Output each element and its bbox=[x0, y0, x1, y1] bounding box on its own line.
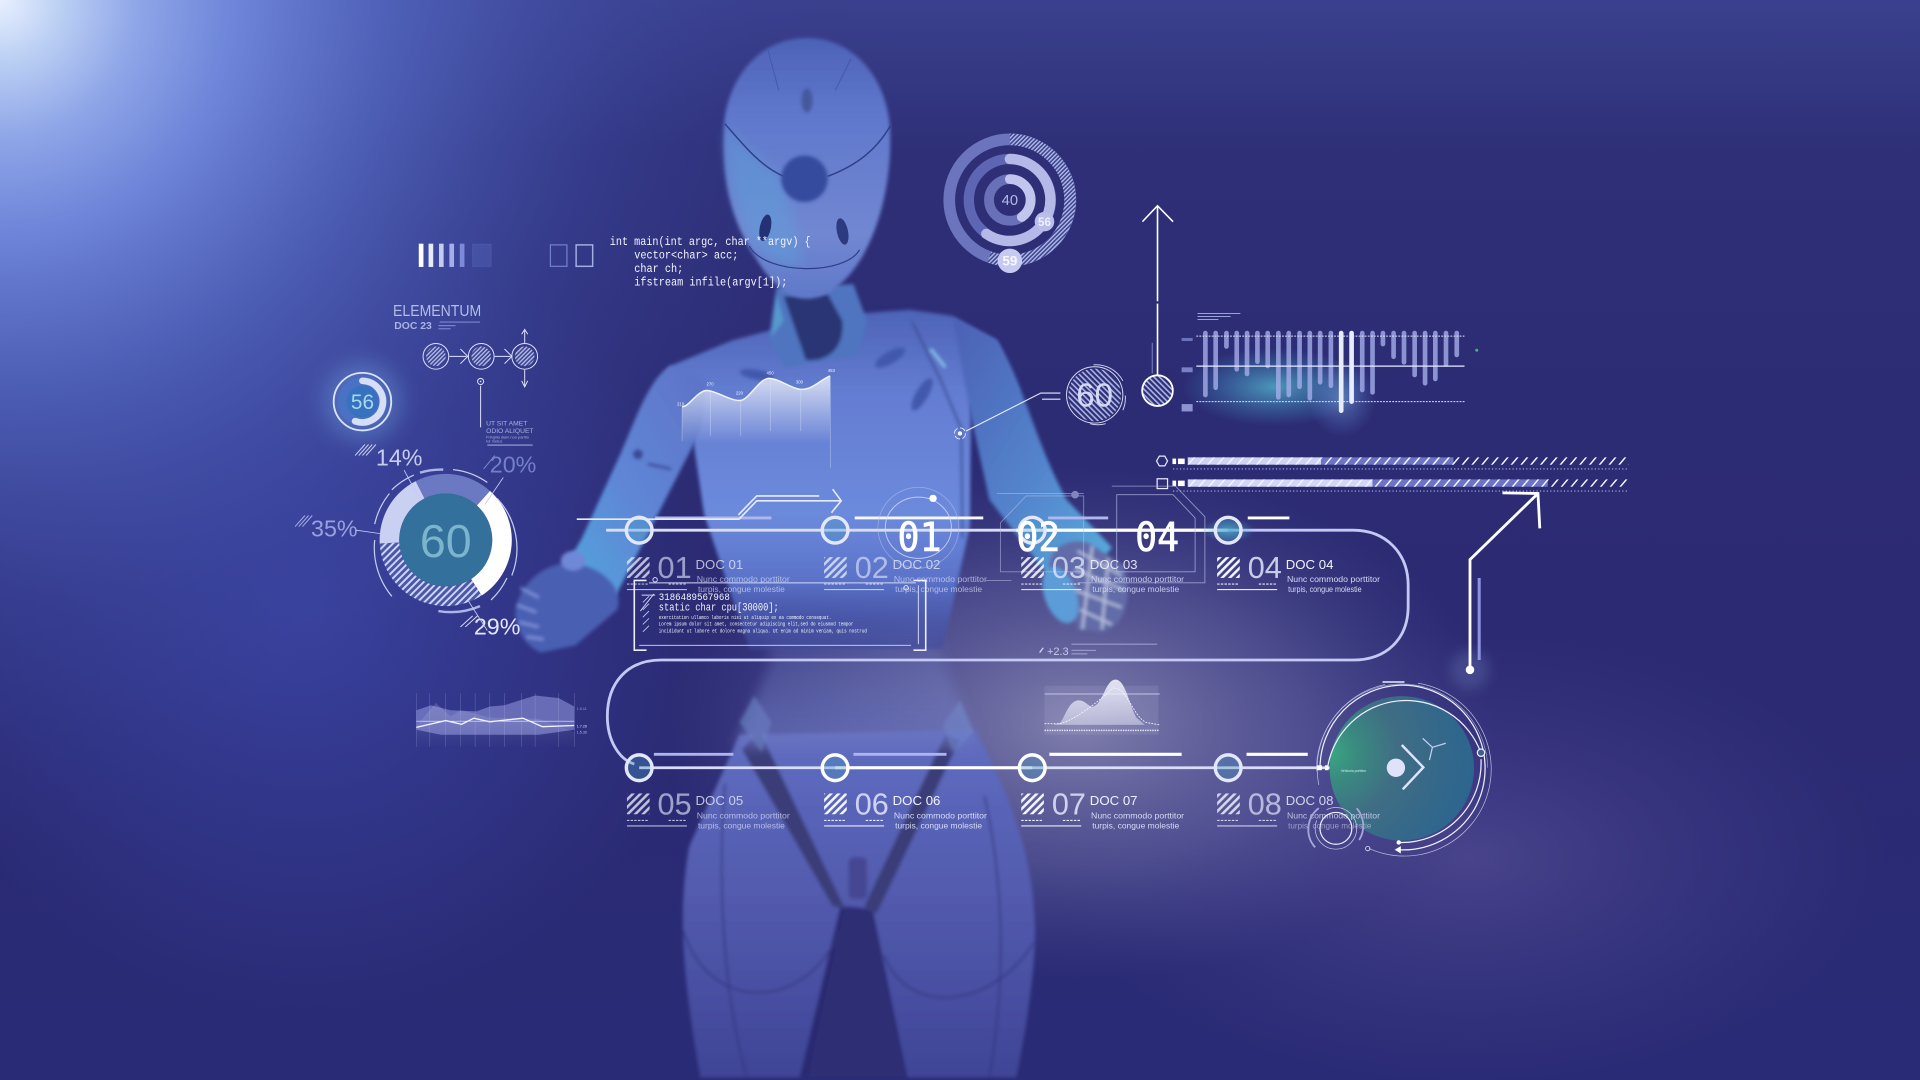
timeline item 05: turpis, congue molestie bbox=[698, 820, 785, 830]
donut chart 60: 60 bbox=[420, 515, 472, 567]
elementum title bbox=[393, 303, 481, 332]
chest line chart: 300 bbox=[796, 379, 804, 384]
chest line chart: 453 bbox=[828, 368, 835, 373]
timeline item 08 bbox=[1217, 787, 1380, 830]
chest line chart: 450 bbox=[767, 371, 774, 376]
timeline item 06: Nunc commodo porttitor bbox=[894, 811, 987, 821]
large mono numbers 01 02 04: 02 bbox=[1016, 513, 1060, 561]
timeline item 02: 02 bbox=[855, 551, 889, 585]
arrow route above timeline bbox=[577, 489, 841, 519]
robot legs bbox=[683, 696, 1035, 1078]
target rings around 01 bbox=[878, 487, 959, 568]
timeline item 07: Nunc commodo porttitor bbox=[1091, 811, 1184, 821]
donut labels and leader lines bbox=[295, 444, 536, 639]
robot torso bbox=[649, 310, 1019, 649]
code box: Lorem ipsum dolor sit amet, consectetur adipiscing elit,sed do eiusmod tempor bbox=[659, 622, 853, 628]
timeline item 06: 06 bbox=[855, 787, 889, 821]
timeline item 05 bbox=[627, 787, 790, 830]
bottom right radar disc: Vehicula porttitor bbox=[1341, 769, 1367, 773]
timeline item 06: DOC 06 bbox=[893, 793, 940, 808]
timeline item 03: Nunc commodo porttitor bbox=[1091, 574, 1184, 584]
gauge 60 with leader: 60 bbox=[1076, 378, 1113, 415]
timeline item 08: DOC 08 bbox=[1286, 793, 1333, 808]
code box: static char cpu[30000]; bbox=[659, 602, 779, 614]
robot right hand bbox=[1035, 541, 1128, 632]
pointer note: ODIO ALIQUET bbox=[486, 428, 534, 435]
timeline item 01: Nunc commodo porttitor bbox=[697, 574, 790, 584]
code snippet: char ch; bbox=[634, 262, 683, 276]
concentric gauge: 59 bbox=[1002, 254, 1017, 269]
timeline item 02: Nunc commodo porttitor bbox=[894, 574, 987, 584]
concentric gauge: 56 bbox=[1038, 216, 1051, 229]
timeline nodes bbox=[626, 517, 1241, 781]
lower left area chart: 1.7.20 bbox=[577, 724, 587, 728]
robot waist haze bbox=[735, 624, 980, 747]
donut labels and leader lines: 29% bbox=[474, 613, 520, 639]
timeline item 05: 05 bbox=[658, 787, 692, 821]
lower left area chart bbox=[416, 693, 587, 747]
chest line chart bbox=[677, 368, 835, 468]
timeline item 08: 08 bbox=[1248, 787, 1282, 821]
robot left hand bbox=[515, 551, 618, 653]
timeline item 02 bbox=[824, 551, 987, 594]
large mono numbers 01 02 04: 01 bbox=[898, 513, 942, 561]
gauge 60 with leader bbox=[954, 365, 1125, 439]
timeline item 04: 04 bbox=[1248, 551, 1282, 585]
donut labels and leader lines: 20% bbox=[490, 452, 536, 478]
timeline item 04: Nunc commodo porttitor bbox=[1287, 574, 1380, 584]
code box bbox=[634, 578, 926, 650]
timeline frame bbox=[606, 518, 1408, 768]
lower left area chart: 1.5.30 bbox=[577, 730, 587, 734]
bottom right radar disc bbox=[1316, 682, 1491, 856]
robot figure bbox=[515, 38, 1128, 1078]
timeline item 03: turpis, congue molestie bbox=[1092, 584, 1179, 594]
pointer note: Fringilla diam non partito bbox=[486, 434, 530, 439]
elementum title: ELEMENTUM bbox=[393, 303, 481, 320]
chest line chart: 210 bbox=[677, 401, 685, 406]
chest line chart: 220 bbox=[736, 390, 744, 395]
code snippet bbox=[610, 235, 811, 289]
concentric gauge: 40 bbox=[1002, 193, 1018, 209]
timeline item 05: DOC 05 bbox=[696, 793, 743, 808]
peak area chart bbox=[1040, 644, 1160, 735]
timeline item 07: 07 bbox=[1052, 787, 1086, 821]
timeline item 01: 01 bbox=[658, 551, 692, 585]
code box: 3186489567968 bbox=[659, 592, 730, 603]
code box: incididunt ut labore et dolore magna aliqua. Ut enim ad minim veniam, quis nostrud bbox=[659, 628, 867, 634]
big diagonal arrow bbox=[1450, 493, 1540, 689]
elementum title: DOC 23 bbox=[394, 321, 432, 332]
chest line chart: 270 bbox=[707, 382, 714, 387]
large mono numbers 01 02 04 bbox=[898, 513, 1179, 561]
donut labels and leader lines: 35% bbox=[311, 515, 358, 541]
concentric gauge bbox=[949, 139, 1070, 273]
pointer note bbox=[478, 378, 534, 445]
timeline item 03: DOC 03 bbox=[1090, 557, 1138, 572]
timeline item 07: turpis, congue molestie bbox=[1092, 820, 1179, 830]
up arrow with hatched base bbox=[1142, 206, 1173, 406]
timeline item 07: DOC 07 bbox=[1090, 793, 1138, 808]
flow chain icon bbox=[423, 329, 538, 387]
robot left arm bbox=[566, 366, 708, 598]
robot neck bbox=[769, 284, 867, 367]
timeline item 02: turpis, congue molestie bbox=[895, 584, 982, 594]
pointer note: tor metus bbox=[486, 439, 502, 444]
peak area chart: +2.3 bbox=[1047, 646, 1069, 658]
bars and squares indicator bbox=[419, 244, 593, 267]
timeline item 06: turpis, congue molestie bbox=[895, 820, 982, 830]
timeline item 08: Nunc commodo porttitor bbox=[1287, 811, 1380, 821]
donut labels and leader lines: 14% bbox=[376, 444, 422, 470]
bar chart bbox=[1182, 313, 1478, 437]
timeline item 01: turpis, congue molestie bbox=[698, 584, 785, 594]
timeline item 06 bbox=[824, 787, 987, 830]
timeline item 01 bbox=[627, 551, 790, 594]
timeline item 05: Nunc commodo porttitor bbox=[697, 811, 790, 821]
timeline item 04: turpis, congue molestie bbox=[1288, 584, 1362, 594]
code snippet: ifstream infile(argv[1]); bbox=[634, 275, 787, 289]
robot head bbox=[724, 38, 890, 299]
code snippet: vector<char> acc; bbox=[634, 248, 738, 262]
code box: exercitation ullamco laboris nisi ut aliquip ex ea commodo consequat. bbox=[659, 615, 831, 621]
code snippet: int main(int argc, char **argv) { bbox=[610, 235, 811, 249]
small gauge 56 bbox=[323, 362, 402, 441]
robot body details bbox=[633, 322, 962, 539]
small gauge 56: 56 bbox=[351, 391, 374, 414]
timeline item 07 bbox=[1021, 787, 1184, 830]
timeline item 02: DOC 02 bbox=[893, 557, 940, 572]
timeline item 01: DOC 01 bbox=[696, 557, 743, 572]
lower left area chart: 1.9.11 bbox=[577, 707, 587, 711]
timeline item 04: DOC 04 bbox=[1286, 557, 1333, 572]
timeline item 03 bbox=[1021, 551, 1184, 594]
large mono numbers 01 02 04: 04 bbox=[1135, 513, 1179, 561]
small ring icon bbox=[1308, 808, 1363, 849]
progress bars bbox=[1157, 456, 1629, 491]
donut chart 60 bbox=[374, 470, 517, 612]
timeline item 08: turpis, congue molestie bbox=[1288, 820, 1372, 830]
timeline item 04 bbox=[1217, 551, 1380, 594]
pointer note: UT SIT AMET bbox=[486, 421, 527, 428]
timeline item 03: 03 bbox=[1052, 551, 1086, 585]
frame around 04 bbox=[1078, 486, 1205, 583]
frame around 02 bbox=[986, 491, 1084, 580]
robot right arm bbox=[953, 318, 1112, 583]
